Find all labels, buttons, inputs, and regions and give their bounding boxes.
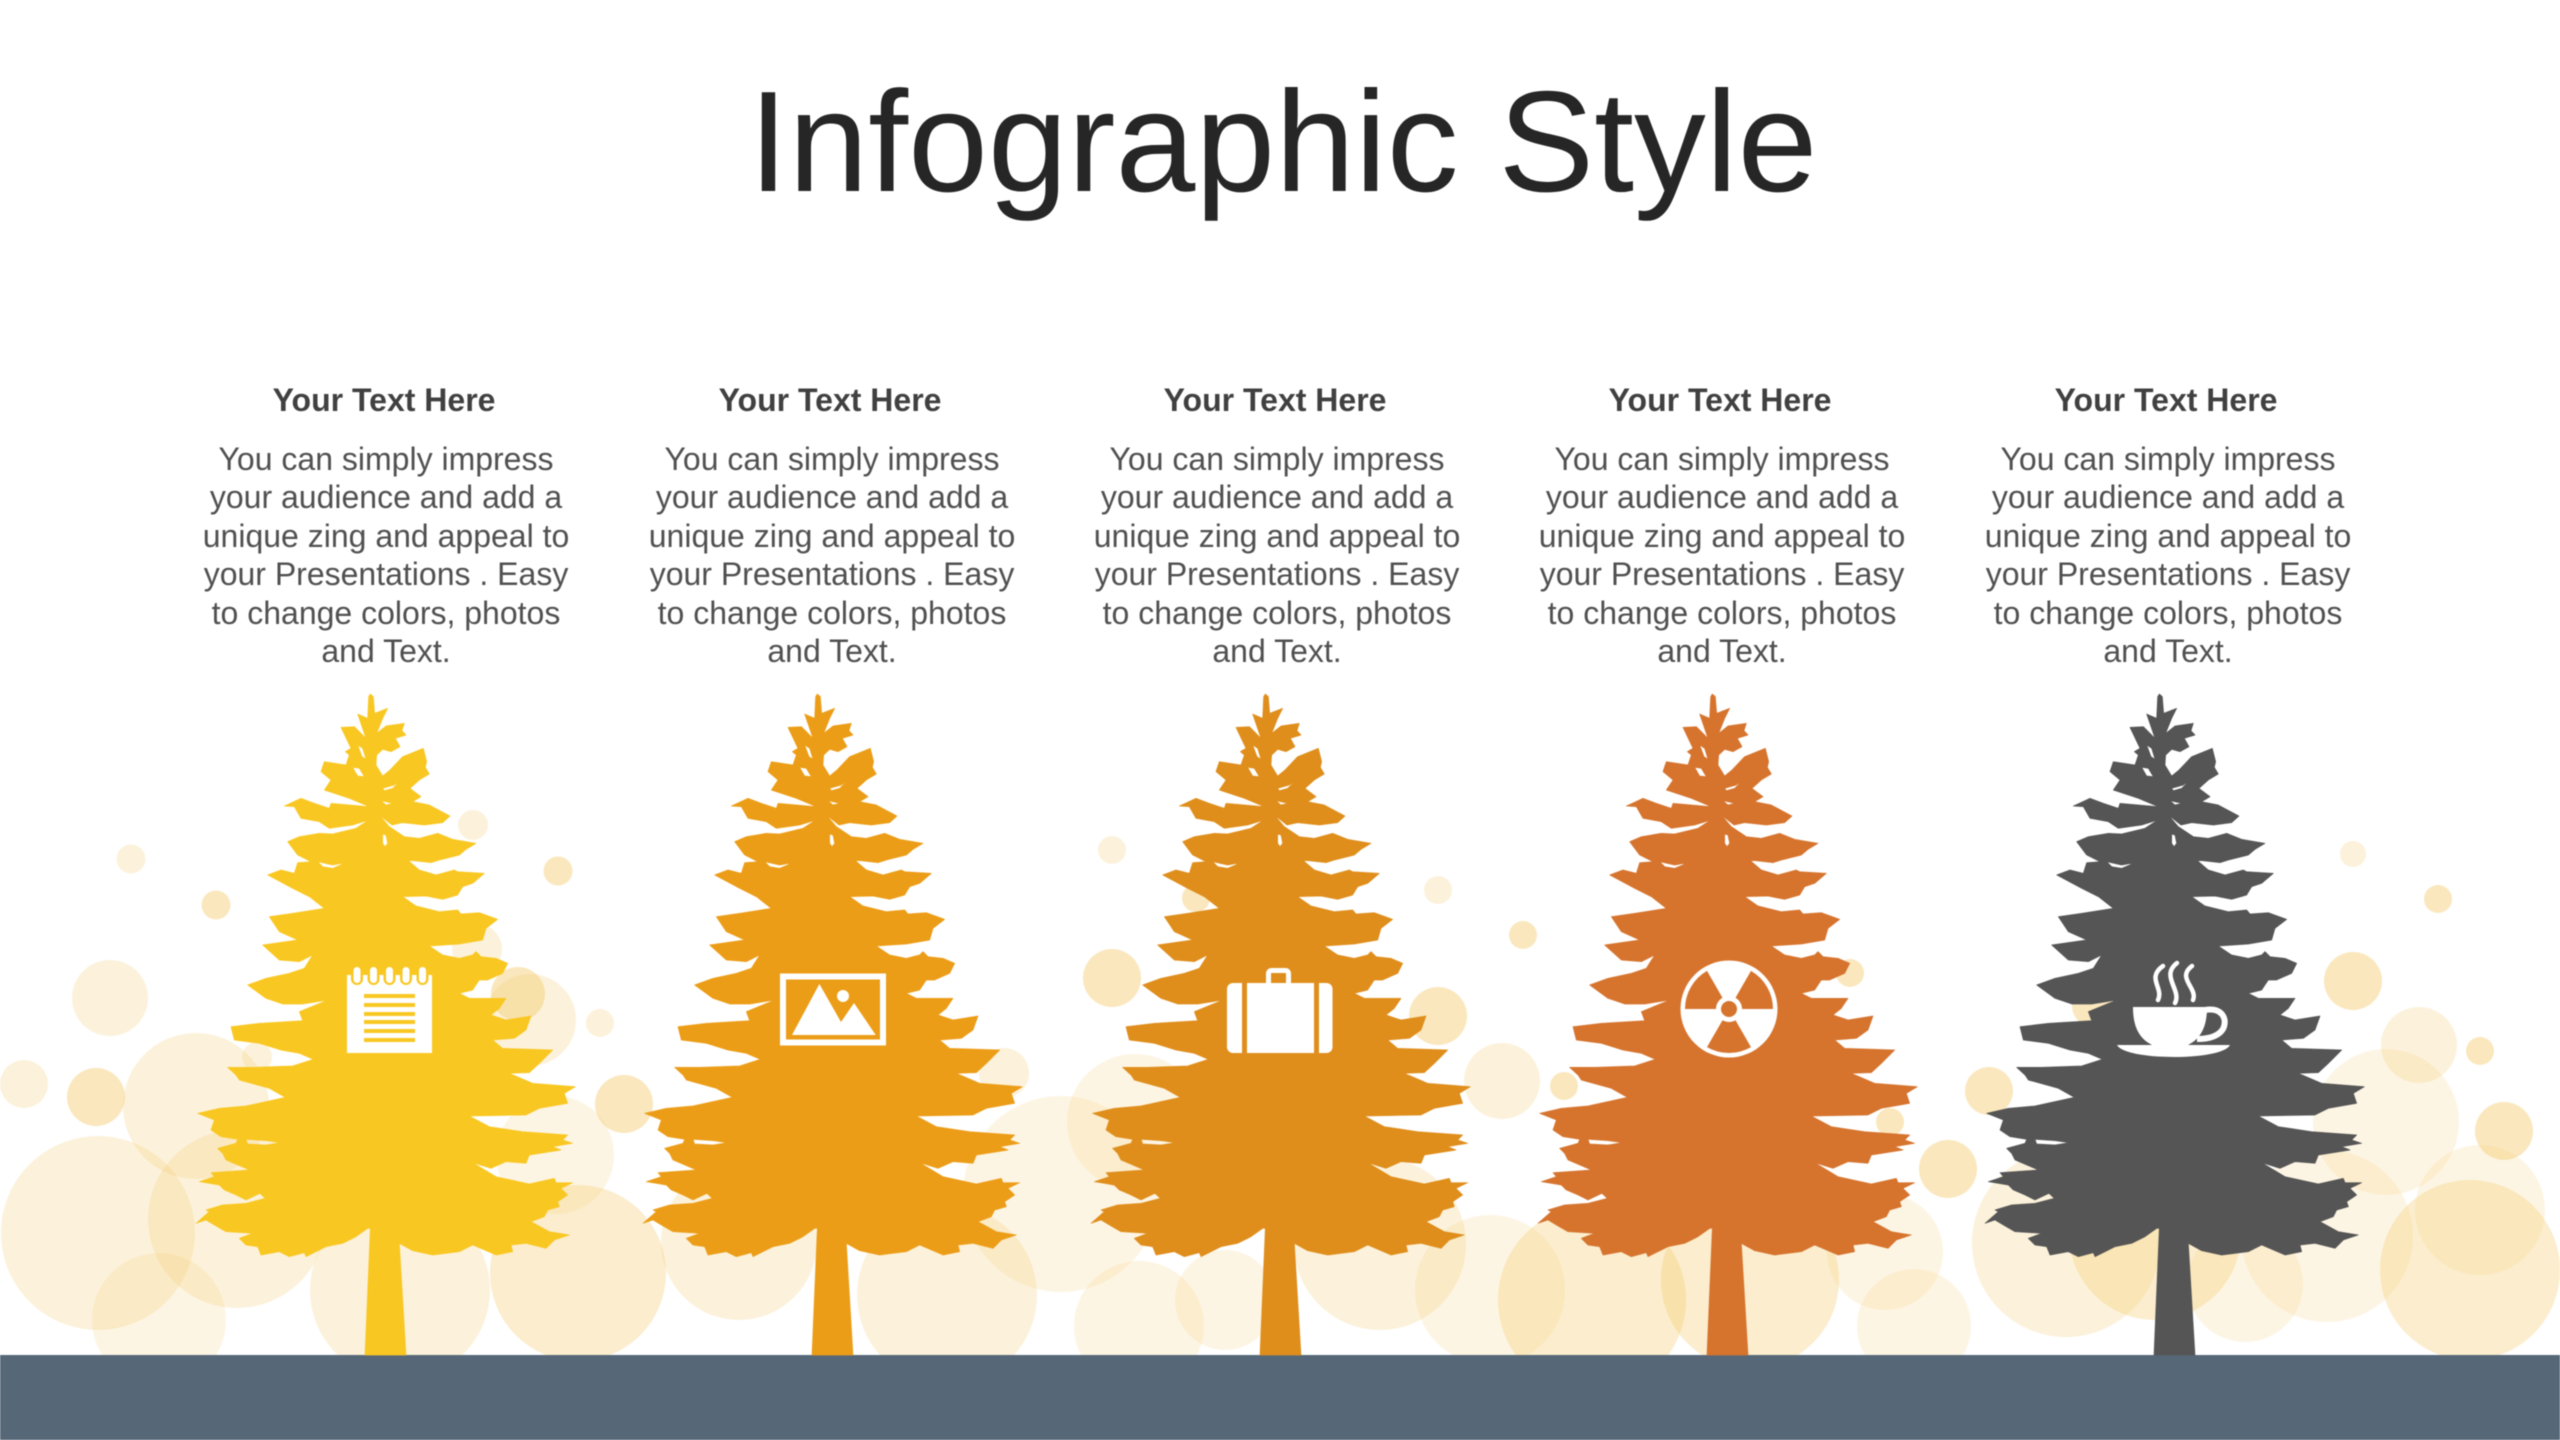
body text 4: unique zing and appeal to xyxy=(1539,518,1905,554)
body text 1: unique zing and appeal to xyxy=(203,518,569,554)
body text 5: unique zing and appeal to xyxy=(1985,518,2351,554)
heading 1: Your Text Here xyxy=(273,382,495,418)
tree 5 xyxy=(1985,694,2364,1355)
column 1 xyxy=(196,382,575,1355)
icon: coffee cup xyxy=(2117,963,2230,1057)
body text 3: your audience and add a xyxy=(1101,479,1453,515)
body text 4: and Text. xyxy=(1657,633,1787,669)
ground bar xyxy=(0,1355,2560,1440)
body text 5: your Presentations . Easy xyxy=(1986,556,2350,592)
column 3 xyxy=(1091,382,1470,1355)
body text 3: You can simply impress xyxy=(1110,441,1444,477)
column 2 xyxy=(643,382,1022,1355)
body text 1: your audience and add a xyxy=(210,479,562,515)
icon: suitcase xyxy=(1227,970,1332,1053)
body text 4: to change colors, photos xyxy=(1548,595,1896,631)
icon: picture xyxy=(783,976,883,1042)
tree 3 xyxy=(1091,694,1470,1355)
column 5 xyxy=(1985,382,2364,1355)
icon: notepad xyxy=(347,965,432,1053)
body text 2: your audience and add a xyxy=(656,479,1008,515)
body text 2: to change colors, photos xyxy=(658,595,1006,631)
body text 2: unique zing and appeal to xyxy=(649,518,1015,554)
body text 3: to change colors, photos xyxy=(1103,595,1451,631)
tree 1 xyxy=(196,694,575,1355)
body text 3: your Presentations . Easy xyxy=(1095,556,1459,592)
heading 5: Your Text Here xyxy=(2055,382,2277,418)
body text 3: unique zing and appeal to xyxy=(1094,518,1460,554)
body text 5: to change colors, photos xyxy=(1994,595,2342,631)
column 4 xyxy=(1538,382,1917,1355)
title: Infographic Style xyxy=(749,62,1817,222)
body text 2: your Presentations . Easy xyxy=(650,556,1014,592)
body text 4: your Presentations . Easy xyxy=(1540,556,1904,592)
icon: radiation xyxy=(1680,960,1778,1058)
body text 2: You can simply impress xyxy=(665,441,999,477)
body text 3: and Text. xyxy=(1212,633,1342,669)
body text 5: your audience and add a xyxy=(1992,479,2344,515)
background bubbles xyxy=(0,810,2560,1394)
heading 2: Your Text Here xyxy=(719,382,941,418)
body text 4: your audience and add a xyxy=(1546,479,1898,515)
body text 5: You can simply impress xyxy=(2001,441,2335,477)
body text 1: and Text. xyxy=(321,633,451,669)
body text 1: your Presentations . Easy xyxy=(204,556,568,592)
tree 4 xyxy=(1538,694,1917,1355)
heading 4: Your Text Here xyxy=(1609,382,1831,418)
body text 5: and Text. xyxy=(2103,633,2233,669)
body text 2: and Text. xyxy=(767,633,897,669)
body text 1: to change colors, photos xyxy=(212,595,560,631)
heading 3: Your Text Here xyxy=(1164,382,1386,418)
tree 2 xyxy=(643,694,1022,1355)
body text 1: You can simply impress xyxy=(219,441,553,477)
body text 4: You can simply impress xyxy=(1555,441,1889,477)
